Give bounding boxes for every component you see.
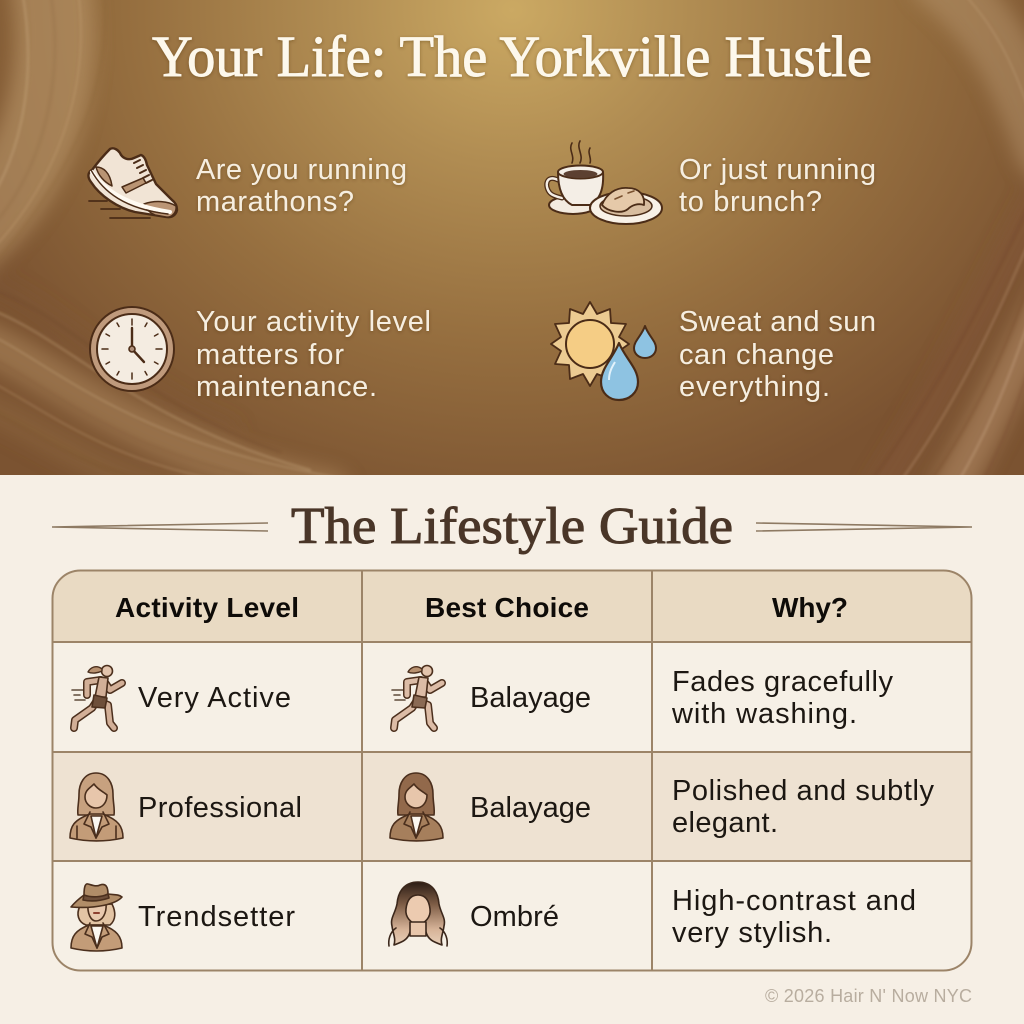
icon: woman in hat xyxy=(71,884,122,951)
table header: Why? xyxy=(772,592,848,623)
text: sweat and sun: can change xyxy=(679,339,834,371)
text: activity level: matters for xyxy=(196,339,344,371)
text: activity level xyxy=(196,306,431,403)
icon: balayage woman xyxy=(390,773,443,841)
icon: ombre hair xyxy=(389,882,447,946)
text: or just running: to brunch? xyxy=(679,186,822,218)
text: sweat and sun: Sweat and sun xyxy=(679,306,876,338)
text: sweat and sun xyxy=(679,306,876,403)
row: professional: Balayage xyxy=(470,792,591,824)
panel: hair background xyxy=(0,0,1024,500)
row: professional: Professional xyxy=(138,792,302,824)
text: are you running: marathons? xyxy=(196,186,354,218)
row: trendsetter: Ombré xyxy=(470,901,559,933)
heading: the lifestyle guide: The Lifestyle Guide xyxy=(291,498,733,555)
row: trendsetter: very stylish. xyxy=(672,917,832,949)
row: trendsetter: High-contrast and xyxy=(672,885,916,917)
icon: runner balayage xyxy=(392,666,442,728)
icon: sun and drops xyxy=(551,302,656,400)
panel: cream background xyxy=(0,475,1024,1024)
footer: copyright: © 2026 Hair N' Now NYC xyxy=(765,986,972,1006)
text: are you running xyxy=(196,154,407,218)
icon: clock xyxy=(90,307,174,391)
table: lifestyle guide xyxy=(52,570,972,971)
text: or just running: Or just running xyxy=(679,154,876,186)
text: sweat and sun: everything. xyxy=(679,371,830,403)
icon: running shoe xyxy=(88,148,177,218)
row: very active: Fades gracefully xyxy=(672,666,894,698)
icon: coffee and pastry xyxy=(547,141,662,224)
icon: runner xyxy=(72,666,122,728)
table header xyxy=(115,592,848,623)
table header: Activity Level xyxy=(115,592,299,623)
row: very active: Balayage xyxy=(470,682,591,714)
row: trendsetter xyxy=(71,882,916,951)
text: activity level: Your activity level xyxy=(196,306,431,338)
table header: Best Choice xyxy=(425,592,589,623)
row: professional: elegant. xyxy=(672,807,778,839)
icon: professional woman xyxy=(70,773,123,841)
text: activity level: maintenance. xyxy=(196,371,377,403)
text: or just running xyxy=(679,154,876,218)
row: trendsetter: Trendsetter xyxy=(138,901,295,933)
row: very active xyxy=(72,666,894,730)
row: professional: Polished and subtly xyxy=(672,775,934,807)
text: are you running: Are you running xyxy=(196,154,407,186)
title: Your Life: The Yorkville Hustle xyxy=(152,24,872,89)
row: professional xyxy=(70,773,934,841)
row: very active: with washing. xyxy=(671,698,857,730)
row: very active: Very Active xyxy=(138,682,291,714)
